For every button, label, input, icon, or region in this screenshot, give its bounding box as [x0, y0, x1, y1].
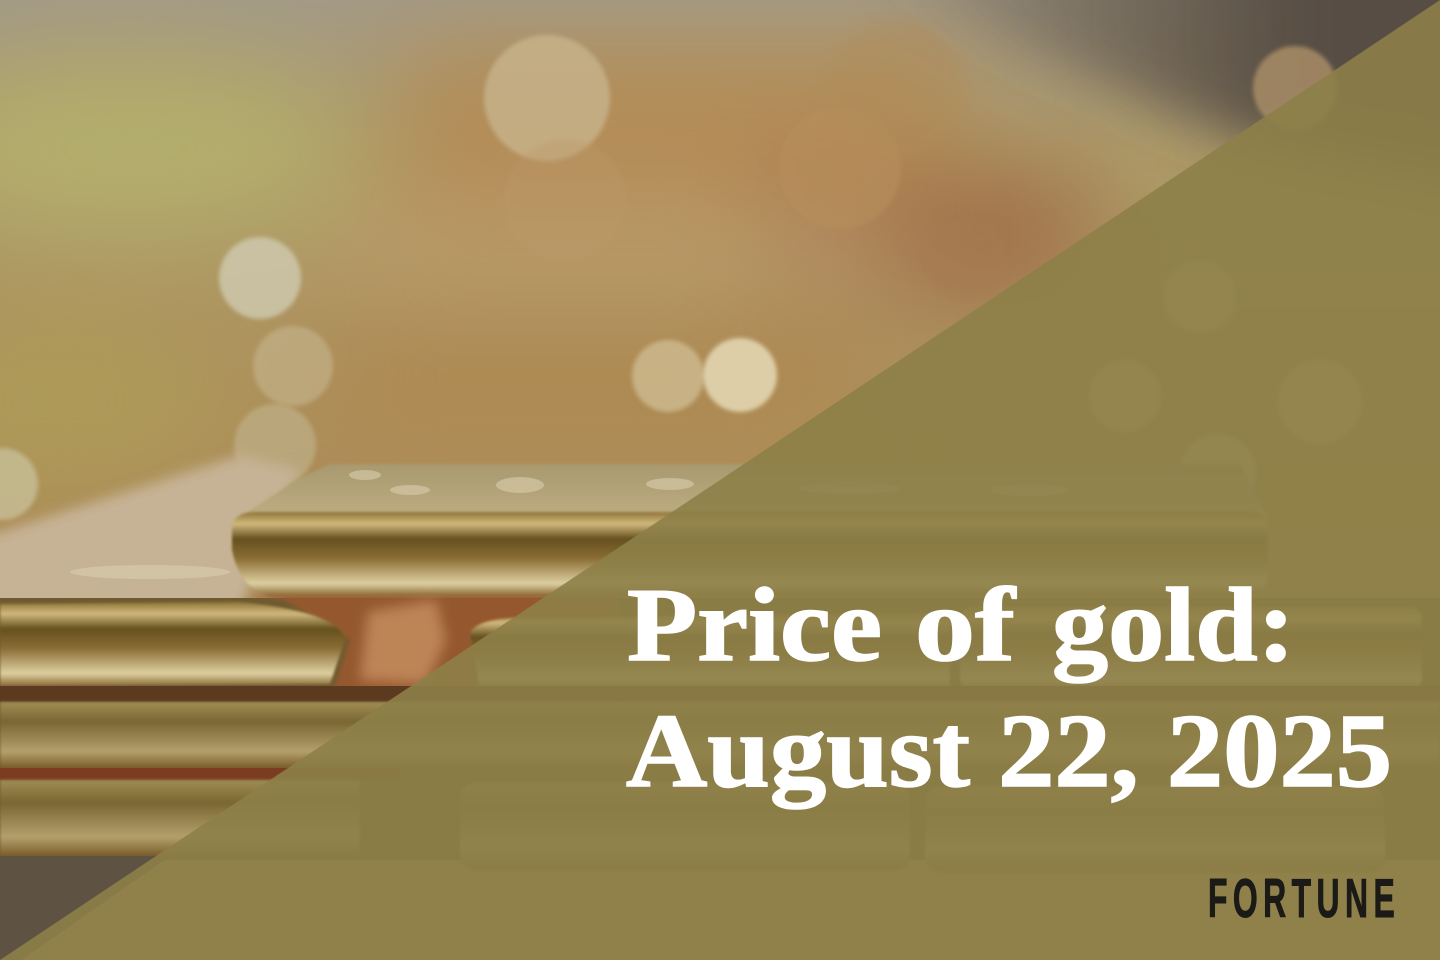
gold grain texture: [70, 470, 1070, 579]
lower surface: [0, 455, 300, 610]
title line 1: of: [915, 566, 1016, 683]
title line 2: August 22, 2025: [626, 692, 1392, 809]
title line 1: gold:: [1052, 566, 1295, 683]
bokeh highlights: [0, 20, 1362, 520]
lower gold bars: [0, 686, 1440, 872]
top gold bar: [232, 464, 1270, 596]
logo: FORTUNE: FORTUNE: [1208, 867, 1395, 929]
dark table surface: [0, 856, 170, 960]
reddish reflection between bars: [250, 596, 620, 700]
title: [626, 566, 1392, 809]
title line 1: Price: [627, 566, 882, 683]
bar row background: [0, 598, 1440, 860]
title line 1: [627, 566, 1295, 683]
middle gold bars: [0, 602, 1422, 692]
